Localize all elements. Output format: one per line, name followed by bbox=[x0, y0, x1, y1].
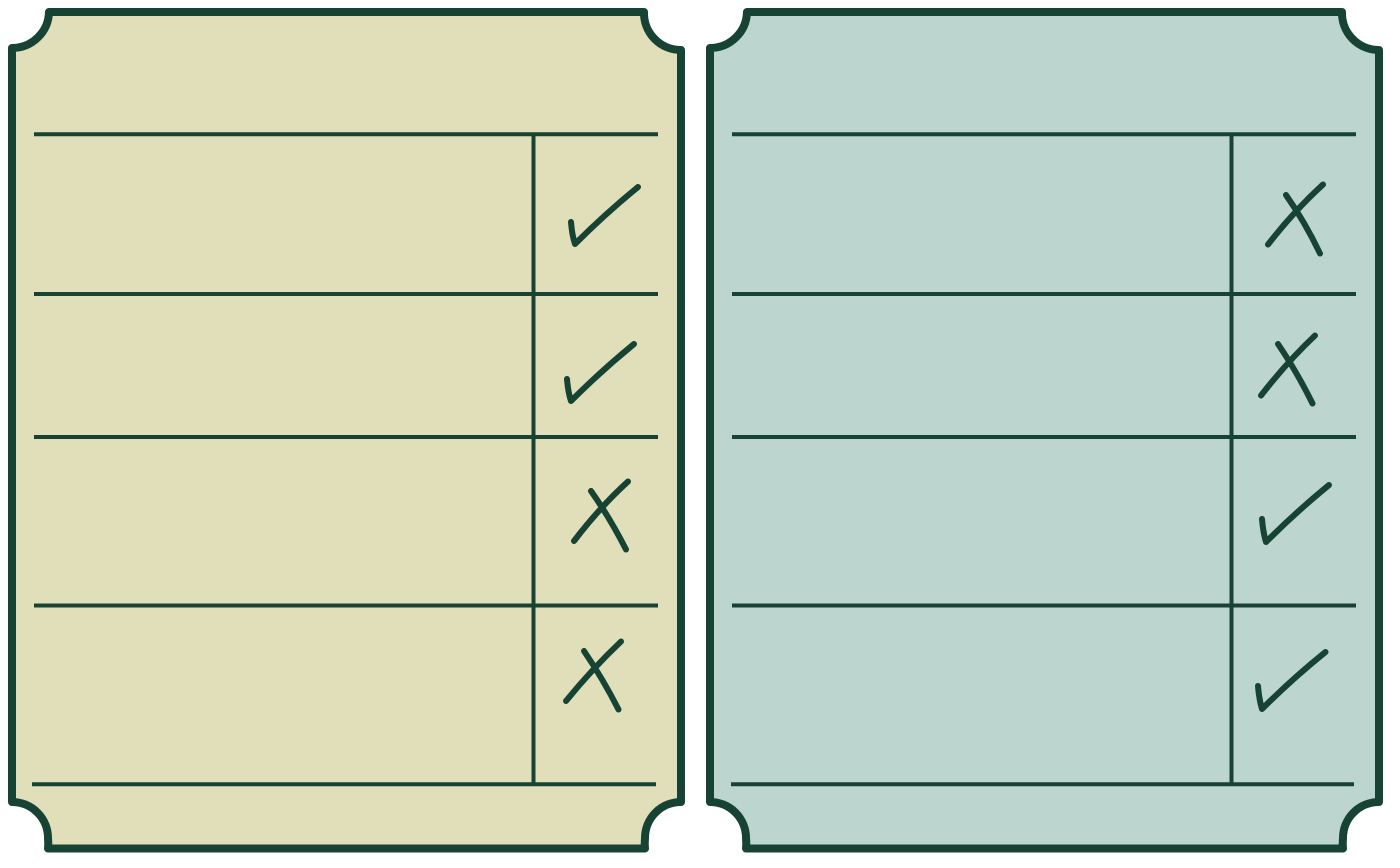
icon: check row 1 left bbox=[571, 187, 638, 244]
card outline: right bbox=[710, 12, 1379, 848]
panel: left card bbox=[12, 12, 681, 848]
table grid: right bbox=[731, 134, 1356, 784]
icon: cross row 1 right bbox=[1268, 184, 1323, 254]
table grid: left bbox=[32, 134, 658, 784]
panel: right card bbox=[710, 12, 1379, 848]
icon: cross row 4 left bbox=[566, 642, 621, 710]
icon: cross row 3 left bbox=[574, 482, 628, 550]
icon: check row 3 right bbox=[1262, 485, 1329, 542]
card outline: left bbox=[12, 12, 681, 848]
icon: cross row 2 right bbox=[1261, 336, 1315, 404]
icon: check row 4 right bbox=[1258, 652, 1326, 709]
icon: check row 2 left bbox=[567, 344, 634, 401]
